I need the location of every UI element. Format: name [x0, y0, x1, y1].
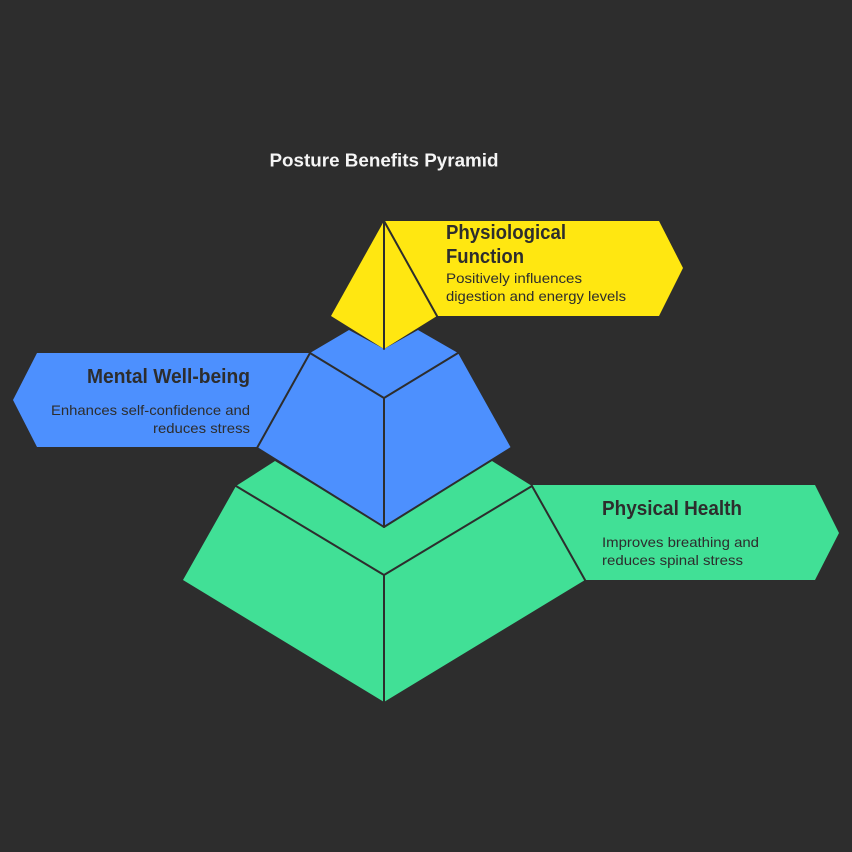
text: physical health description: [602, 534, 759, 568]
panel: physical health banner: [532, 485, 839, 580]
text: mental well-being description: Enhances self-confidence and: [51, 402, 250, 418]
heading: physiological function: Function: [446, 246, 524, 268]
panel: mental well-being banner: [13, 353, 310, 447]
text: physical health description: Improves breathing and: [602, 534, 759, 550]
heading: physical health: Physical Health: [602, 498, 742, 520]
text: physiological function description: digestion and energy levels: [446, 288, 626, 304]
text: mental well-being description: reduces stress: [153, 420, 250, 436]
text: physical health description: reduces spinal stress: [602, 552, 743, 568]
text: mental well-being description: [51, 402, 250, 436]
text: physiological function description: Positively influences: [446, 270, 582, 286]
heading: mental well-being: Mental Well-being: [87, 366, 250, 388]
pyramid tier: green base: [183, 461, 585, 702]
title: Posture Benefits Pyramid: [270, 150, 498, 170]
text: physiological function description: [446, 270, 626, 304]
panel: physiological function banner: [385, 221, 683, 316]
pyramid tier: blue middle: [257, 330, 511, 527]
pyramid tier: yellow top: [331, 221, 437, 349]
heading: physiological function: [446, 222, 566, 268]
heading: physiological function: Physiological: [446, 222, 566, 244]
